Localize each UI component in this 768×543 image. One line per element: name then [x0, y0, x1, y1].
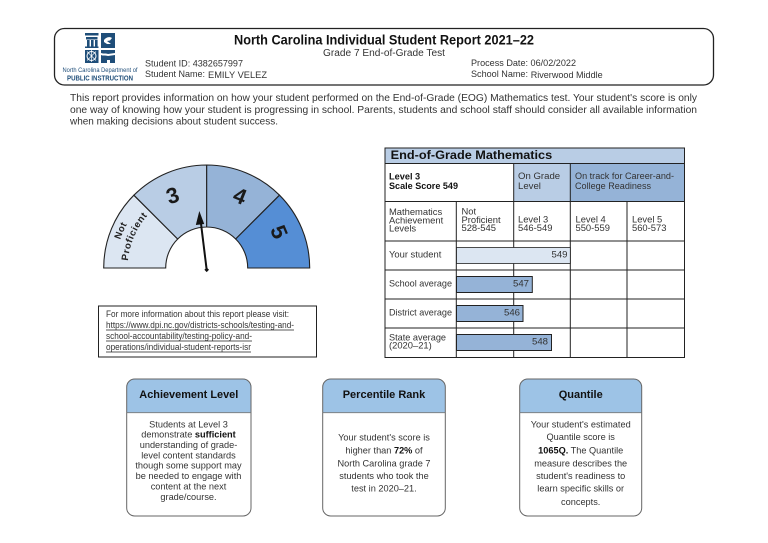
card text: students who took the — [339, 471, 429, 481]
bar: state average: (2020–21) — [389, 340, 432, 350]
bar: district average: 546 — [504, 308, 520, 318]
table grid — [385, 148, 684, 358]
column header: career and college readiness: On track for Career-and- — [575, 171, 674, 182]
bar: state average: 548 — [532, 336, 548, 348]
intro paragraph: when making decisions about student success. — [69, 116, 278, 128]
achievement level ranges: Level 5 — [632, 214, 662, 224]
icon: NC DPI logo: PUBLIC INSTRUCTION — [67, 76, 133, 82]
school name: School Name: — [471, 69, 528, 80]
card text: higher than 72% of — [345, 446, 423, 456]
card text: grade/course. — [160, 492, 217, 502]
intro paragraph — [69, 93, 698, 128]
intro paragraph: This report provides information on how your student performed on the End-of-Grade (EOG) Mathematics test. Your student's score is only — [70, 93, 698, 104]
card: achievement level — [127, 379, 251, 516]
gauge chart — [103, 164, 310, 272]
level and scale score — [389, 172, 458, 191]
header panel — [54, 28, 714, 85]
achievement level ranges: 528-545 — [462, 222, 496, 233]
process date: Process Date: 06/02/2022 — [471, 58, 576, 69]
card text: understanding of grade- — [140, 440, 237, 450]
bar: your student: Your student — [389, 248, 442, 260]
bar: school average: School average — [389, 278, 452, 288]
achievement level ranges: 550-559 — [576, 222, 610, 233]
school name: Riverwood Middle — [531, 70, 603, 81]
card text: Quantile score is — [546, 432, 615, 442]
achievement level ranges: Mathematics — [389, 206, 442, 217]
card: quantile: Quantile — [559, 389, 603, 401]
level and scale score: Scale Score 549 — [389, 181, 458, 191]
intro paragraph: one way of knowing how your student is progressing in school. Parents, students and school staff should consider all available information — [70, 105, 697, 116]
mathematics results table — [385, 148, 684, 358]
card text — [135, 420, 242, 502]
achievement level ranges: 560-573 — [632, 222, 666, 233]
bar: school average: 547 — [513, 278, 529, 290]
card text: 1065Q. The Quantile — [538, 445, 623, 455]
gauge label: not proficient: Proficient — [121, 212, 148, 260]
table title bar — [385, 148, 684, 164]
bar: school average — [389, 276, 532, 292]
card text: student's readiness to — [536, 471, 625, 481]
card: percentile rank: Percentile Rank — [343, 389, 426, 401]
column header: on grade level — [518, 171, 560, 192]
achievement level ranges: Levels — [389, 222, 416, 234]
achievement level ranges: Level 3 — [518, 214, 548, 224]
subtitle: Grade 7 End-of-Grade Test — [323, 48, 445, 59]
gauge label: not proficient: Not — [114, 222, 127, 240]
column header: on grade level: On Grade — [518, 171, 560, 182]
achievement level ranges: Level 4 — [576, 214, 606, 224]
bar: state average — [389, 332, 552, 350]
card text: content at the next — [151, 481, 227, 491]
student name: Student Name: — [145, 69, 205, 80]
student name: EMILY VELEZ — [208, 70, 267, 81]
gauge label: 5: 5 — [265, 221, 293, 243]
link info box: https://www.dpi.nc.gov/districts-schools/testing-and- — [106, 320, 294, 330]
card text: learn specific skills or — [537, 484, 624, 494]
link info box: For more information about this report please visit: — [106, 309, 289, 319]
card text: Students at Level 3 — [149, 420, 228, 430]
bar: your student: 549 — [551, 250, 568, 260]
card text: Your student's score is — [338, 433, 430, 443]
card text: be needed to engage with — [136, 471, 241, 481]
bar: your student — [389, 248, 570, 264]
column header: on grade level: Level — [518, 181, 541, 192]
achievement level ranges: Not — [462, 206, 476, 216]
icon: NC DPI logo: North Carolina Department of — [62, 67, 138, 74]
card: achievement level: Achievement Level — [139, 389, 238, 401]
card text — [338, 433, 430, 494]
achievement level ranges: 546-549 — [518, 222, 552, 233]
student id: Student ID: 4382657997 — [145, 58, 243, 70]
link info box: school-accountability/testing-policy-and- — [106, 331, 252, 341]
bar: district average — [389, 306, 523, 322]
link info box: operations/individual-student-reports-isr — [106, 342, 251, 352]
title: North Carolina Individual Student Report 2021–22 — [234, 32, 534, 48]
level and scale score: Level 3 — [389, 172, 420, 182]
achievement level ranges: Achievement — [389, 214, 444, 226]
achievement level ranges: Proficient — [462, 214, 501, 225]
card text: Your student's estimated — [531, 419, 631, 429]
card text: level content standards — [141, 450, 236, 460]
column header: career and college readiness — [575, 171, 674, 192]
card text: North Carolina grade 7 — [338, 459, 430, 469]
card text: measure describes the — [534, 459, 627, 469]
card: percentile rank — [323, 379, 445, 516]
card text: concepts. — [561, 497, 600, 507]
bar: state average: State average — [389, 332, 446, 342]
card text: test in 2020–21. — [351, 484, 417, 494]
link info box — [98, 306, 316, 357]
bar: district average: District average — [389, 306, 452, 318]
card text: demonstrate sufficient — [141, 430, 236, 440]
card: quantile — [520, 379, 642, 516]
gauge label: 3: 3 — [163, 182, 182, 209]
table title bar: End-of-Grade Mathematics — [391, 148, 552, 162]
card text — [531, 419, 631, 507]
gauge label: 4: 4 — [230, 182, 251, 210]
icon: NC DPI logo — [62, 33, 138, 82]
column header: career and college readiness: College Readiness — [575, 181, 651, 192]
arrow: gauge needle — [196, 211, 209, 272]
card text: though some support may — [135, 461, 242, 471]
achievement level ranges — [389, 206, 666, 234]
